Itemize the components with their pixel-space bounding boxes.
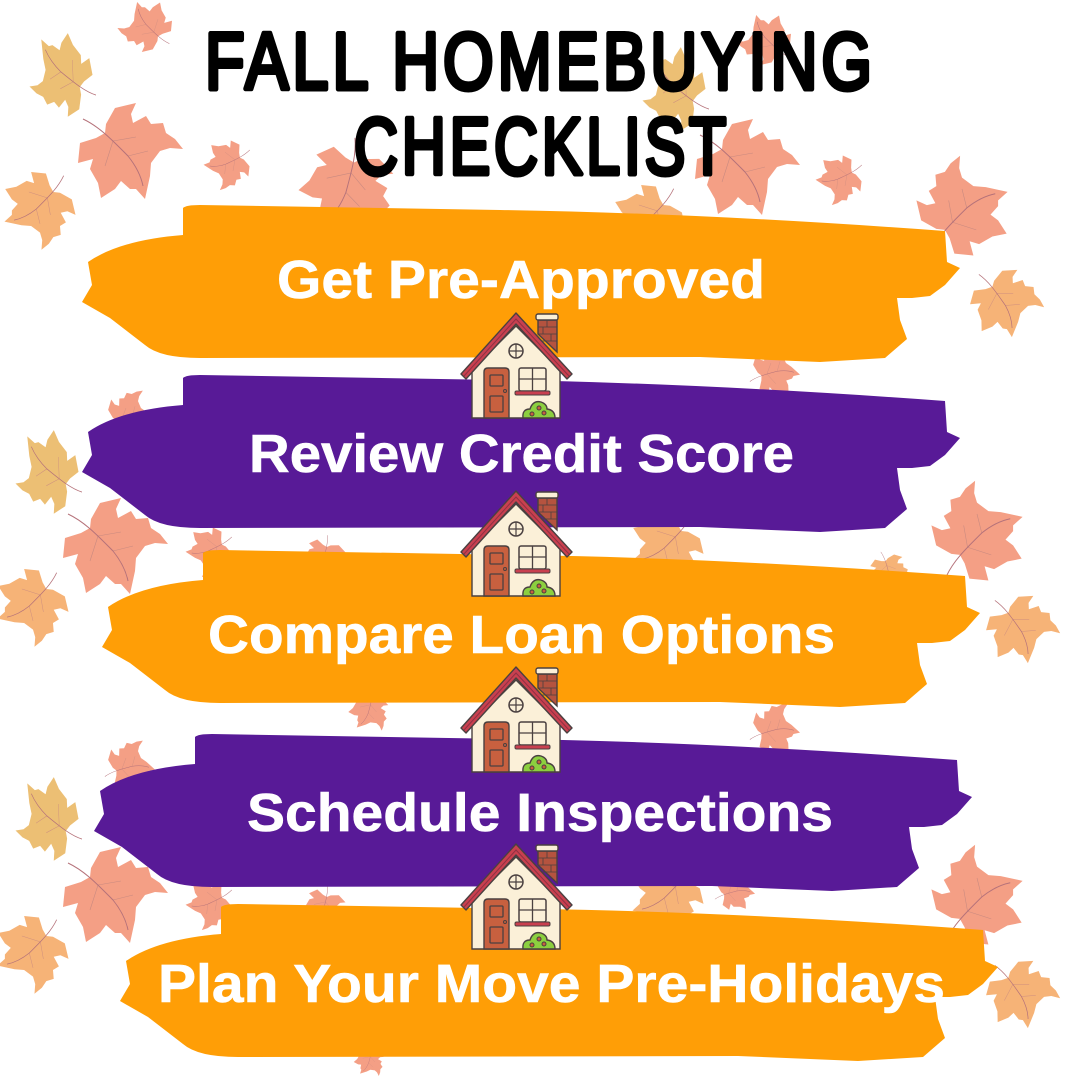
icon: house 3 xyxy=(461,667,572,772)
icon: house 4 xyxy=(461,844,572,949)
step 5: Plan Your Move Pre-Holidays xyxy=(120,904,998,1061)
step 1: Get Pre-Approved: Get Pre-Approved xyxy=(277,250,765,310)
step 5: Plan Your Move Pre-Holidays: Plan Your Move Pre-Holidays xyxy=(158,954,945,1014)
step 4: Schedule Inspections xyxy=(94,734,972,891)
title xyxy=(205,17,876,192)
title: FALL HOMEBUYING xyxy=(205,17,876,107)
icon: house 1 xyxy=(461,313,572,418)
title: CHECKLIST xyxy=(354,102,730,192)
icon: house 2 xyxy=(461,491,572,596)
step 2: Review Credit Score: Review Credit Score xyxy=(249,424,794,484)
step 2: Review Credit Score xyxy=(82,375,960,532)
step 3: Compare Loan Options xyxy=(102,550,980,707)
step 1: Get Pre-Approved xyxy=(82,205,960,362)
step 4: Schedule Inspections: Schedule Inspections xyxy=(247,783,833,843)
step 3: Compare Loan Options: Compare Loan Options xyxy=(208,605,835,665)
